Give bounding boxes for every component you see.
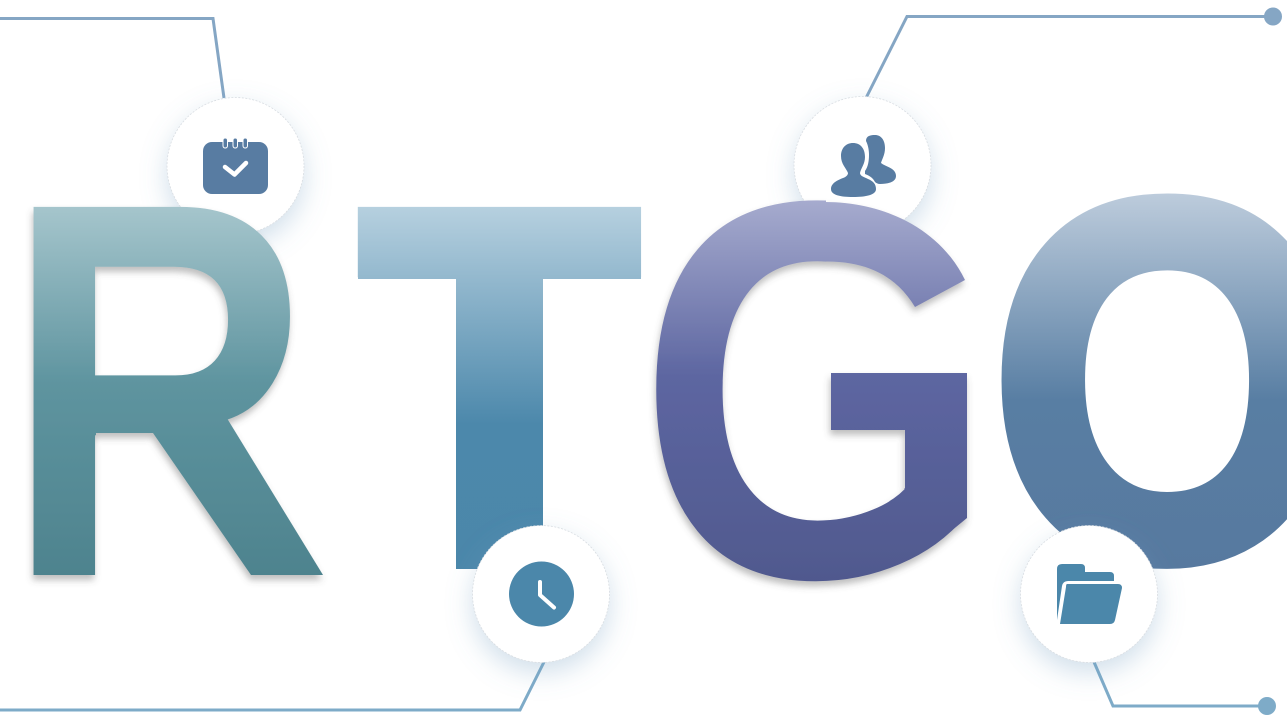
icon badge: calendar (167, 98, 304, 234)
connector: bottom left (0, 662, 544, 710)
connector: bottom right with dot (1094, 662, 1276, 715)
letter R (29, 206, 323, 584)
letter G: G (638, 89, 993, 690)
connector: top left (0, 18, 224, 98)
icon badge: people (794, 96, 931, 234)
letter R: R (5, 91, 313, 689)
letter T: T (359, 104, 640, 670)
icon badge: clock (472, 526, 610, 662)
letter G (652, 200, 970, 590)
connector: top right with dot (866, 8, 1282, 98)
icon badge: folder (1020, 526, 1158, 662)
